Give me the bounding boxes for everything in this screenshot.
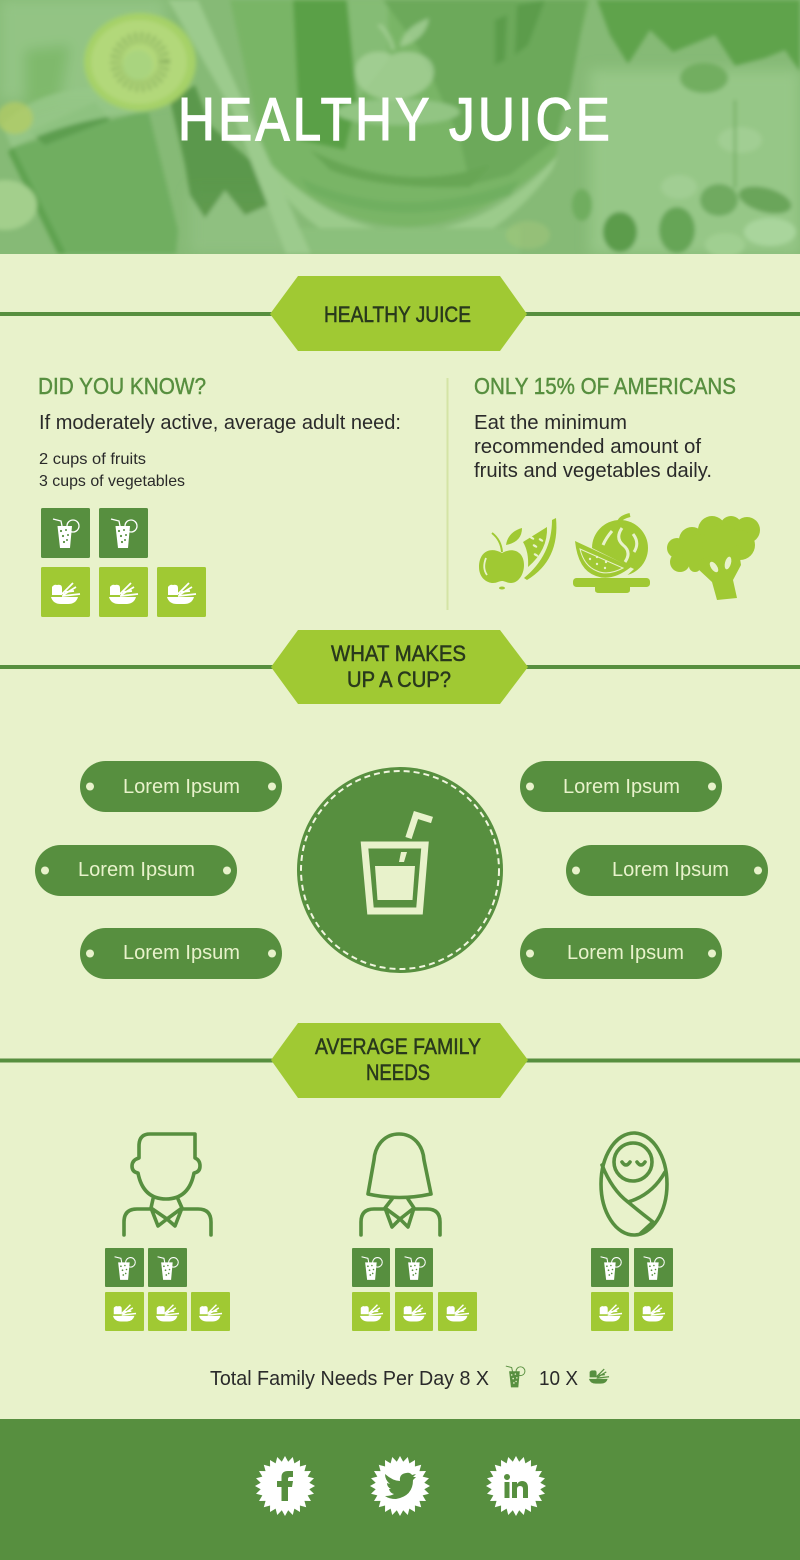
photo: green leaves: [597, 0, 800, 72]
icon: drink: [506, 1366, 525, 1387]
icon: cup with straw: [364, 815, 432, 911]
photo: parsley: [170, 85, 268, 218]
heading: did you know: DID YOU KNOW?: [38, 373, 206, 399]
pill: bottom right: [520, 928, 722, 979]
text: adult need: If moderately active, average adult need:: [39, 412, 401, 434]
section banner: what makes up a cup: UP A CUP?: [347, 667, 451, 692]
photo: kiwi slice: [84, 13, 196, 111]
photo: scattered seeds: [572, 63, 796, 257]
text: eat the minimum: [474, 412, 712, 482]
icon: facebook: [255, 1456, 315, 1516]
pill: middle right: Lorem Ipsum: [612, 859, 729, 881]
pill: middle right: [566, 845, 768, 896]
icon: vegetable bowl: [589, 1369, 609, 1384]
text: eat the minimum: recommended amount of: [474, 436, 701, 458]
section banner: average family needs: AVERAGE FAMILY: [315, 1034, 481, 1059]
text: eat the minimum: Eat the minimum: [474, 412, 627, 434]
central badge: cup: [297, 767, 503, 973]
pill: bottom right: Lorem Ipsum: [567, 942, 684, 964]
icon: twitter: [370, 1456, 430, 1516]
icon grid: baby servings: [591, 1248, 673, 1331]
photo: straw band: [168, 0, 311, 254]
total family needs line: 10 X: [539, 1368, 578, 1390]
text: cups list: 3 cups of vegetables: [39, 473, 185, 490]
section banner: healthy juice: [0, 276, 800, 351]
pill: middle left: Lorem Ipsum: [78, 859, 195, 881]
icon: apple and melon slice: [479, 518, 556, 590]
main title: HEALTHY JUICE: [178, 86, 610, 153]
photo: apple logo on jar: [355, 18, 434, 100]
icon: melon on plate: [570, 515, 650, 593]
heading: only 15 percent: ONLY 15% OF AMERICANS: [474, 373, 736, 399]
text: eat the minimum: fruits and vegetables daily.: [474, 460, 712, 482]
total family needs line: [210, 1366, 609, 1390]
icon grid: fruit and vegetable cups: [41, 508, 206, 617]
pill: top right: Lorem Ipsum: [563, 776, 680, 798]
section banner: what makes up a cup: WHAT MAKES: [331, 641, 466, 666]
panel: did you know: [38, 373, 401, 617]
pill: top left: [80, 761, 282, 812]
section banner: healthy juice: HEALTHY JUICE: [324, 302, 471, 327]
pill: middle left: [35, 845, 237, 896]
icon: woman: [361, 1134, 440, 1235]
panel: only 15 percent: [474, 373, 760, 600]
footer: [0, 1419, 800, 1560]
text: cups list: 2 cups of fruits: [39, 451, 146, 468]
photo: juice glass: [0, 88, 178, 254]
icon grid: woman servings: [352, 1248, 477, 1331]
header photo banner: [0, 0, 800, 257]
section banner: average family needs: NEEDS: [366, 1060, 430, 1085]
pill: bottom left: [80, 928, 282, 979]
total family needs line: Total Family Needs Per Day 8 X: [210, 1368, 489, 1390]
section banner: what makes up a cup: [0, 630, 800, 704]
pill: top right: [520, 761, 722, 812]
icon grid: man servings: [105, 1248, 230, 1331]
photo: blender jar: [230, 0, 590, 254]
section banner: average family needs: [0, 1023, 800, 1098]
icon: broccoli: [667, 516, 760, 600]
text: cups list: [39, 451, 185, 490]
icon: man: [124, 1134, 211, 1235]
pill: top left: Lorem Ipsum: [123, 776, 240, 798]
icon: linkedin: [486, 1456, 546, 1516]
pill: bottom left: Lorem Ipsum: [123, 942, 240, 964]
icon: swaddled baby: [601, 1133, 667, 1235]
photo: soft background patches: [0, 0, 800, 254]
